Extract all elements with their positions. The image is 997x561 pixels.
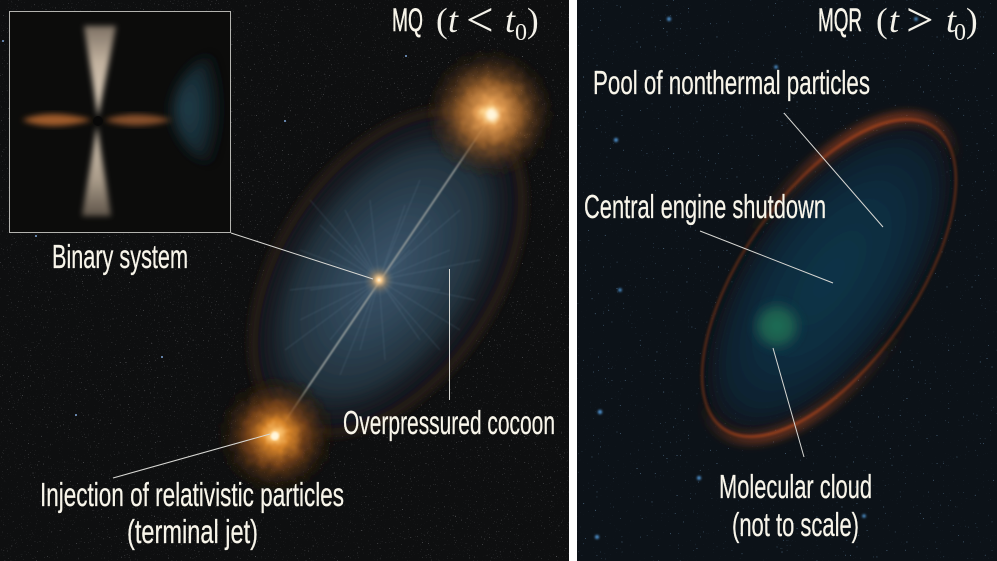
- label: central engine shutdown: Central engine shutdown: [584, 188, 826, 225]
- title: MQR: 0: [954, 20, 966, 46]
- inset: accretion disc left: [22, 114, 92, 126]
- orange shell rim: [700, 106, 958, 450]
- label: overpressured cocoon: Overpressured cocoon: [343, 404, 555, 441]
- bright blue stars: [595, 17, 918, 539]
- inset: lower jet: [82, 126, 111, 216]
- title: MQR: t: [946, 0, 957, 40]
- leader: pool: [784, 113, 883, 227]
- panel: MQ (t < t0): [0, 0, 578, 561]
- panel: MQR (t > t0): [577, 0, 997, 561]
- label: injection of relativistic particles: (terminal jet): [127, 513, 258, 550]
- title: MQR: MQR: [818, 2, 862, 38]
- relativistic jet: [288, 134, 479, 416]
- leader: molecular cloud: [773, 348, 804, 457]
- inset: compact object: [93, 116, 103, 126]
- inset: upper jet: [84, 26, 116, 117]
- title: MQ: 0: [515, 20, 527, 46]
- title: MQR: ): [966, 1, 978, 40]
- leader: cocoon: [449, 269, 450, 400]
- title: MQ: [393, 8, 538, 40]
- title: MQ: ): [527, 1, 539, 40]
- inset: companion wind: [167, 58, 220, 161]
- top terminal hotspot: [430, 52, 554, 174]
- label: binary system: Binary system: [52, 238, 188, 275]
- bright stars left: [2, 40, 407, 416]
- leader: central engine: [700, 231, 833, 283]
- title: MQ: t: [448, 0, 459, 40]
- title: MQR: (: [876, 1, 888, 40]
- title: MQR: [819, 8, 976, 40]
- nonthermal particle pool: [705, 123, 952, 426]
- title: MQ: MQ: [392, 2, 423, 38]
- title: MQ: (: [436, 1, 448, 40]
- title: MQ: t: [505, 0, 516, 40]
- inset: accretion disc right: [104, 114, 172, 126]
- label: injection of relativistic particles: Injection of relativistic particles: [40, 476, 344, 513]
- bottom terminal hotspot: [218, 381, 334, 490]
- label: molecular cloud: [719, 468, 872, 543]
- leader: injection: [113, 434, 270, 478]
- label: molecular cloud: (not to scale): [732, 506, 859, 543]
- central binary glow: [366, 266, 392, 294]
- cocoon outer orange shell: [244, 104, 532, 439]
- label: pool of nonthermal particles: Pool of nonthermal particles: [593, 64, 870, 101]
- label: molecular cloud: Molecular cloud: [719, 468, 872, 505]
- binary system inset: [10, 12, 230, 232]
- label: injection of relativistic particles: [40, 476, 344, 550]
- molecular cloud: [752, 302, 802, 351]
- leader: binary system: [231, 233, 373, 279]
- overpressured cocoon: [272, 134, 500, 410]
- title: MQR: t: [889, 0, 900, 40]
